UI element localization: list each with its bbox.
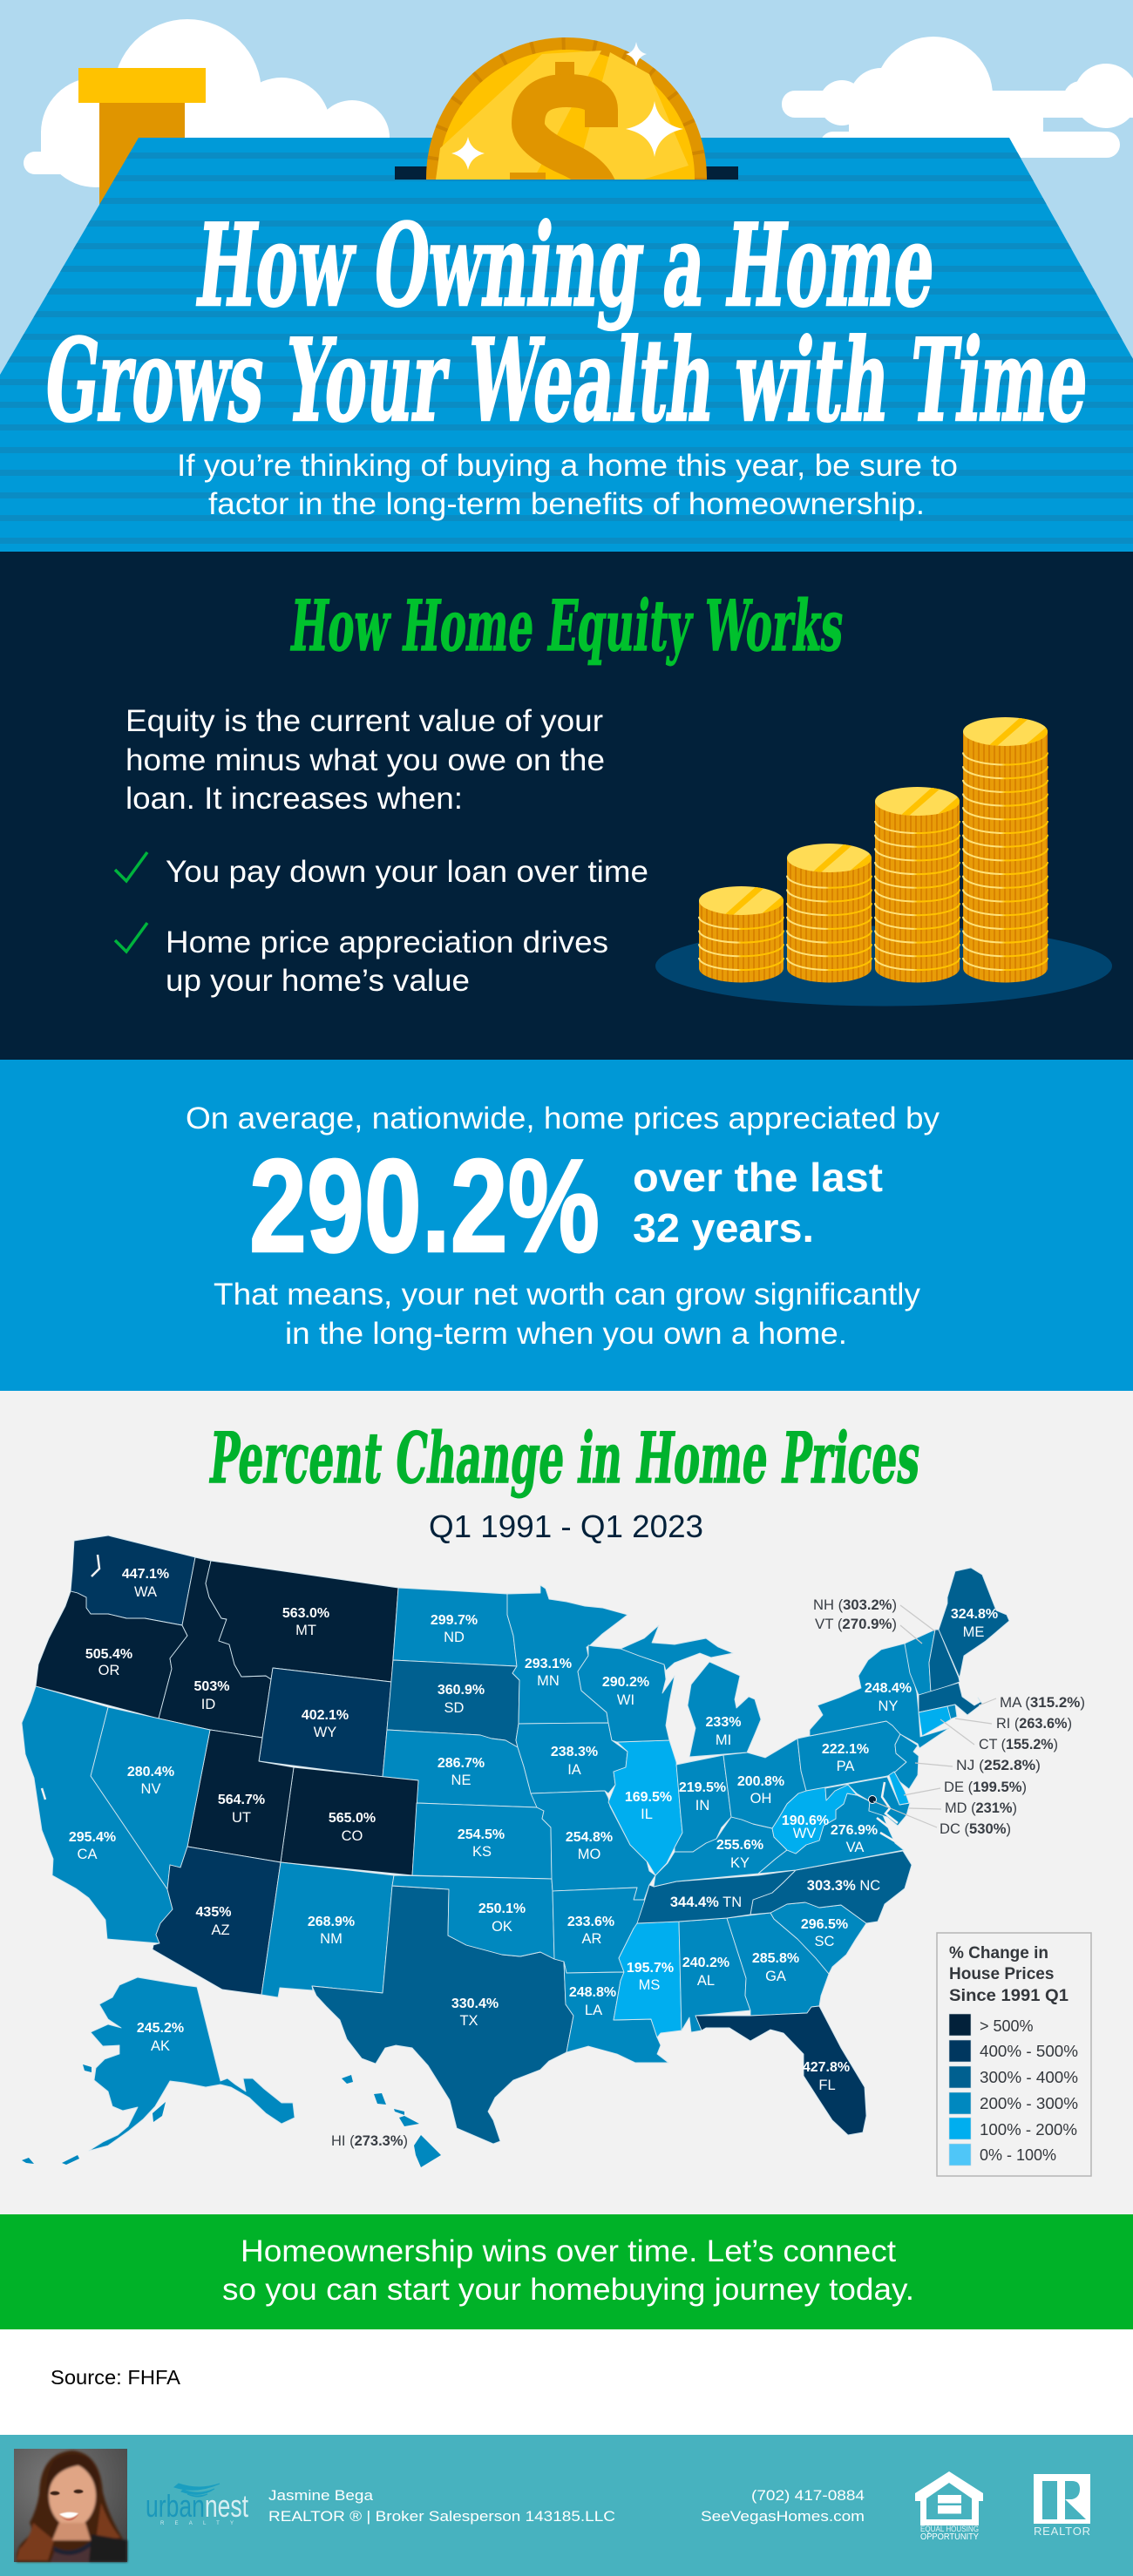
label: FL xyxy=(803,2060,850,2093)
label: HI: HI (273.3%) xyxy=(331,2133,408,2149)
icon: green check 1 xyxy=(115,852,147,881)
label: OK: 250.1% xyxy=(478,1901,526,1916)
state: WY xyxy=(259,1668,391,1777)
label: MT: MT xyxy=(295,1623,316,1638)
outside labels xyxy=(331,1597,1085,2149)
state: MI upper xyxy=(621,1625,733,1671)
text: net worth xyxy=(214,1278,921,1351)
label: ME xyxy=(951,1607,998,1640)
state: WV xyxy=(772,1771,857,1854)
big number: 290.2% xyxy=(249,1132,600,1280)
label: LA: 248.8% xyxy=(569,1985,616,2000)
icon: left cloud xyxy=(24,19,390,187)
label: MA: MA (315.2%) xyxy=(1000,1695,1085,1711)
label: DC: DC (530%) xyxy=(940,1821,1011,1837)
legend title: House Prices xyxy=(949,1965,1054,1983)
label: GA: 285.8% xyxy=(752,1951,799,1966)
text: agent name and title: Jasmine Bega xyxy=(268,2487,374,2504)
label: VA: 276.9% xyxy=(831,1823,878,1838)
label: SC: 296.5% xyxy=(801,1917,848,1932)
label: KY: 255.6% xyxy=(716,1838,763,1853)
label: AL xyxy=(682,1956,729,1989)
panel: how home equity works xyxy=(0,552,1133,1060)
label: ID: 503% xyxy=(194,1679,229,1694)
text: agent contact: (702) 417-0884 xyxy=(751,2487,865,2504)
label: MS xyxy=(627,1961,674,1993)
state: AR xyxy=(553,1888,646,1973)
label: MD: MD (231%) xyxy=(945,1800,1017,1816)
text: net worth: in the long-term when you own a home. xyxy=(285,1317,847,1351)
label: IL: 169.5% xyxy=(625,1790,672,1805)
label: WI: 290.2% xyxy=(602,1675,649,1690)
icon: chimney xyxy=(78,68,206,216)
state: OK xyxy=(392,1875,554,1959)
coin stack 1 xyxy=(699,885,786,983)
label: OK xyxy=(478,1901,526,1935)
label: OH xyxy=(737,1774,784,1807)
panel: percent change map xyxy=(0,1391,1133,2214)
coin stack 3 xyxy=(875,786,962,983)
state: AK xyxy=(89,1977,295,2151)
text: bullet 2: up your home’s value xyxy=(166,964,470,998)
label: OR: OR xyxy=(98,1663,119,1678)
state: MO xyxy=(531,1791,655,1900)
label: MN: MN xyxy=(537,1673,560,1689)
coin stack 2 xyxy=(787,844,875,983)
Chesapeake and coastal bays xyxy=(42,1555,898,1841)
state: CT xyxy=(919,1706,951,1736)
state: WI xyxy=(578,1645,675,1742)
label: IA: 238.3% xyxy=(551,1745,598,1759)
text: bullet 2 xyxy=(166,925,608,998)
state: KY xyxy=(654,1817,787,1887)
label: NY: NY xyxy=(879,1698,898,1714)
label: MT xyxy=(282,1606,329,1638)
label: VT: VT (270.9%) xyxy=(815,1617,897,1632)
logo: urbannest realty: urbannest xyxy=(146,2488,248,2524)
state: VT xyxy=(905,1630,935,1695)
state: MA xyxy=(919,1683,982,1715)
label: NM: 268.9% xyxy=(308,1915,355,1929)
label: IN: IN xyxy=(695,1798,709,1813)
title xyxy=(39,199,1096,447)
icon: equal housing opportunity: OPPORTUNITY xyxy=(920,2532,979,2542)
label: OR xyxy=(85,1647,132,1678)
label: OR: 505.4% xyxy=(85,1647,132,1662)
state: UT xyxy=(187,1730,294,1862)
label: AK: AK xyxy=(151,2038,170,2054)
label: WV xyxy=(782,1813,829,1841)
state: NE xyxy=(383,1730,537,1807)
state: ND xyxy=(393,1588,517,1666)
label: WA: 447.1% xyxy=(122,1567,169,1582)
label: SC xyxy=(801,1917,848,1949)
icon: gold coin with dollar sign xyxy=(395,37,738,180)
label: ND: 299.7% xyxy=(431,1613,478,1628)
label: VA xyxy=(831,1823,878,1855)
label: OH: OH xyxy=(750,1791,771,1807)
label: GA xyxy=(752,1951,799,1984)
legend labels: 200% - 300% xyxy=(980,2095,1078,2112)
DC marker xyxy=(868,1795,877,1804)
state: IL xyxy=(608,1740,682,1875)
label: WI xyxy=(602,1675,649,1708)
text: equity definition: home minus what you owe on the xyxy=(126,743,605,777)
label: NV: NV xyxy=(141,1781,160,1797)
label: TX xyxy=(451,1996,499,2029)
label: TX: 330.4% xyxy=(451,1996,499,2011)
text: over the last 32 years: over the last xyxy=(633,1155,883,1200)
label: AK: 245.2% xyxy=(137,2021,184,2036)
label: KS: KS xyxy=(472,1844,492,1860)
label: MO: 254.8% xyxy=(566,1830,613,1845)
icon: realtor R: REALTOR xyxy=(1034,2525,1090,2538)
choropleth map of US states xyxy=(22,1535,1009,2167)
state: WA xyxy=(71,1535,195,1625)
label: KY: KY xyxy=(730,1855,750,1871)
text: stat intro: On average, nationwide, home prices appreciated by xyxy=(186,1102,940,1135)
label: RI: RI (263.6%) xyxy=(996,1716,1072,1732)
label: NY: 248.4% xyxy=(865,1681,912,1696)
label: FL: FL xyxy=(818,2078,836,2093)
state: VA xyxy=(758,1793,904,1874)
label: NE: NE xyxy=(451,1773,471,1788)
text: net worth: That means, your net worth can grow significantly xyxy=(214,1278,921,1312)
label: ME: ME xyxy=(963,1624,984,1640)
label: CO: 565.0% xyxy=(329,1811,376,1826)
text: over the last 32 years: 32 years. xyxy=(633,1205,814,1251)
label: AR: AR xyxy=(582,1931,602,1947)
label: LA xyxy=(569,1985,616,2018)
label: MS: 195.7% xyxy=(627,1961,674,1976)
label: NM: NM xyxy=(320,1931,343,1947)
label: MS: MS xyxy=(639,1977,660,1993)
legend title xyxy=(949,1944,1069,2005)
label: IN xyxy=(679,1780,726,1813)
label: IN: 219.5% xyxy=(679,1780,726,1795)
label: AL: 240.2% xyxy=(682,1956,729,1970)
label: CA xyxy=(69,1830,116,1862)
label: SD: SD xyxy=(444,1700,465,1716)
label: SD xyxy=(438,1683,485,1716)
label: WV: 190.6% xyxy=(782,1813,829,1828)
legend labels: 0% - 100% xyxy=(980,2146,1056,2164)
state: IN xyxy=(675,1755,731,1852)
label: NC: 303.3% NC xyxy=(807,1878,880,1894)
label: SD: 360.9% xyxy=(438,1683,485,1698)
label: OH: 200.8% xyxy=(737,1774,784,1789)
label: AR xyxy=(567,1915,614,1947)
state: OR xyxy=(36,1591,187,1718)
state: TN xyxy=(637,1870,796,1923)
text: equity definition: Equity is the current value of your xyxy=(126,704,603,738)
label: WI: WI xyxy=(617,1692,634,1708)
label: NM xyxy=(308,1915,355,1947)
label: CA: CA xyxy=(78,1847,97,1862)
label: NE: 286.7% xyxy=(438,1756,485,1771)
leader lines for northeast labels xyxy=(873,1605,996,1827)
panel: nationwide appreciation stat xyxy=(0,1060,1133,1391)
icon: equal housing opportunity: EQUAL HOUSING xyxy=(920,2525,979,2533)
label: ND xyxy=(431,1613,478,1645)
label: IA: IA xyxy=(567,1762,581,1778)
text: agent name and title xyxy=(268,2487,615,2525)
label: GA: GA xyxy=(765,1969,786,1984)
label: MI xyxy=(706,1715,741,1748)
legend labels: 100% - 200% xyxy=(980,2121,1077,2139)
label: KY xyxy=(716,1838,763,1871)
state: NV xyxy=(91,1707,210,1889)
panel: header sky and roof xyxy=(0,0,1133,552)
state: NY xyxy=(810,1644,949,1748)
panel: call to action xyxy=(0,2214,1133,2329)
label: LA: LA xyxy=(585,2003,602,2018)
label: UT: 564.7% xyxy=(218,1793,265,1807)
label: AR: 233.6% xyxy=(567,1915,614,1929)
legend swatches xyxy=(949,2014,971,2166)
label: CO xyxy=(329,1811,376,1844)
label: TN: 344.4% TN xyxy=(670,1895,742,1910)
state: FL xyxy=(695,2006,866,2135)
label: VA: VA xyxy=(846,1840,864,1855)
subtitle xyxy=(177,449,958,521)
state: MS xyxy=(614,1922,682,2037)
label: AZ xyxy=(196,1905,231,1938)
label: IL: IL xyxy=(641,1807,653,1822)
label: ME: 324.8% xyxy=(951,1607,998,1622)
state: RI xyxy=(947,1705,957,1719)
text: agent name and title: REALTOR ® | Broker Salesperson 143185.LLC xyxy=(268,2508,615,2525)
label: KS xyxy=(458,1827,505,1860)
label: MT: 563.0% xyxy=(282,1606,329,1621)
text: bullet 2: Home price appreciation drives xyxy=(166,925,608,959)
icon: green check 2 xyxy=(115,923,147,952)
state: ID xyxy=(159,1557,271,1738)
label: MI: MI xyxy=(716,1732,731,1748)
panel: agent footer xyxy=(0,2435,1133,2576)
label: MN xyxy=(525,1657,572,1689)
label: PA: 222.1% xyxy=(822,1742,869,1757)
label: AK xyxy=(137,2021,184,2054)
label: PA: PA xyxy=(837,1759,854,1774)
state: DE xyxy=(889,1772,909,1805)
text: call to action xyxy=(222,2234,914,2307)
legend xyxy=(937,1933,1091,2176)
state: AZ xyxy=(153,1847,281,1995)
legend labels xyxy=(980,2017,1078,2164)
state: TX xyxy=(312,1886,573,2144)
label: SC: SC xyxy=(815,1934,835,1949)
state: MI lower xyxy=(688,1662,761,1757)
legend labels: 300% - 400% xyxy=(980,2069,1078,2086)
legend labels: 400% - 500% xyxy=(980,2043,1078,2060)
label: AZ: AZ xyxy=(211,1922,230,1938)
text: over the last 32 years xyxy=(633,1155,883,1251)
label: NY xyxy=(865,1681,912,1714)
state: MD xyxy=(825,1777,910,1826)
roof xyxy=(0,138,1133,552)
state: OH xyxy=(723,1739,806,1828)
label: AL: AL xyxy=(697,1973,715,1989)
logo: urbannest realty: REALTY xyxy=(160,2521,234,2526)
label: UT: UT xyxy=(232,1810,251,1826)
label: PA xyxy=(822,1742,869,1774)
state: NM xyxy=(261,1862,394,1997)
label: ID: ID xyxy=(201,1697,215,1712)
legend title: % Change in xyxy=(949,1944,1048,1963)
label: CA: 295.4% xyxy=(69,1830,116,1845)
label: WA xyxy=(122,1567,169,1600)
state: KS xyxy=(412,1803,552,1879)
state: NJ xyxy=(893,1734,919,1789)
label: ID xyxy=(194,1679,229,1712)
label: TX: TX xyxy=(459,2013,478,2029)
label: KS: 254.5% xyxy=(458,1827,505,1842)
state: PA xyxy=(797,1721,906,1791)
state: AK islands xyxy=(22,2064,166,2165)
text: equity definition: loan. It increases when: xyxy=(126,782,463,816)
icon: equal housing opportunity xyxy=(915,2471,983,2542)
label: CO: CO xyxy=(342,1828,363,1844)
label: CT: CT (155.2%) xyxy=(979,1737,1058,1752)
label: WV: WV xyxy=(793,1826,816,1841)
label: NV xyxy=(127,1765,174,1797)
label: WA: WA xyxy=(134,1584,157,1600)
label: NV: 280.4% xyxy=(127,1765,174,1779)
state: CO xyxy=(281,1767,418,1875)
state: CA xyxy=(22,1686,173,1943)
label: WY: WY xyxy=(314,1725,336,1740)
legend labels: > 500% xyxy=(980,2017,1034,2035)
icon: realtor R xyxy=(1034,2474,1090,2538)
state: SD xyxy=(387,1660,519,1747)
state: MT xyxy=(206,1561,398,1682)
label: WY xyxy=(302,1708,349,1740)
map value labels xyxy=(69,1567,998,2093)
label: WY: 402.1% xyxy=(302,1708,349,1723)
label: OK: OK xyxy=(492,1919,512,1935)
icon: coin stacks on plate xyxy=(655,716,1112,1006)
subtitle: factor in the long-term benefits of homeownership. xyxy=(208,487,925,521)
state: GA xyxy=(727,1913,829,2016)
label: IA xyxy=(551,1745,598,1778)
text: equity definition xyxy=(126,704,605,816)
label: NE xyxy=(438,1756,485,1788)
subheading: date range: Q1 1991 - Q1 2023 xyxy=(429,1508,703,1544)
text: call to action: Homeownership wins over time. Let’s connect xyxy=(241,2234,896,2268)
state: SC xyxy=(770,1902,866,1974)
subtitle: If you’re thinking of buying a home this year, be sure to xyxy=(177,449,958,483)
label: NJ: NJ (252.8%) xyxy=(956,1758,1041,1773)
icon: right cloud xyxy=(782,37,1133,158)
state: LA xyxy=(564,1962,668,2063)
state: HI xyxy=(342,2075,441,2167)
label: IL xyxy=(625,1790,672,1822)
text: call to action: so you can start your homebuying journey today. xyxy=(222,2273,914,2307)
label: MN: 293.1% xyxy=(525,1657,572,1671)
agent photo xyxy=(14,2449,127,2562)
text: agent contact: SeeVegasHomes.com xyxy=(701,2508,865,2525)
state: ME xyxy=(939,1568,1009,1678)
state: NC xyxy=(750,1851,912,1923)
text: agent contact xyxy=(701,2487,865,2525)
state: NH xyxy=(929,1630,960,1692)
label: UT xyxy=(218,1793,265,1826)
coin stack 4 xyxy=(963,716,1051,983)
label: MO: MO xyxy=(578,1847,600,1862)
label: FL: 427.8% xyxy=(803,2060,850,2075)
text: bullet 1: You pay down your loan over time xyxy=(166,855,648,889)
label: ND: ND xyxy=(444,1630,465,1645)
state: MN xyxy=(507,1585,628,1724)
legend title: Since 1991 Q1 xyxy=(949,1987,1069,2005)
text: source: Source: FHFA xyxy=(51,2366,181,2389)
label: MO xyxy=(566,1830,613,1862)
panel: source xyxy=(0,2329,1133,2435)
label: DE: DE (199.5%) xyxy=(944,1779,1027,1795)
label: MI: 233% xyxy=(706,1715,741,1730)
state: IA xyxy=(516,1723,628,1793)
state: AL xyxy=(679,1918,750,2032)
label: AZ: 435% xyxy=(196,1905,231,1920)
label: NH: NH (303.2%) xyxy=(813,1597,897,1613)
